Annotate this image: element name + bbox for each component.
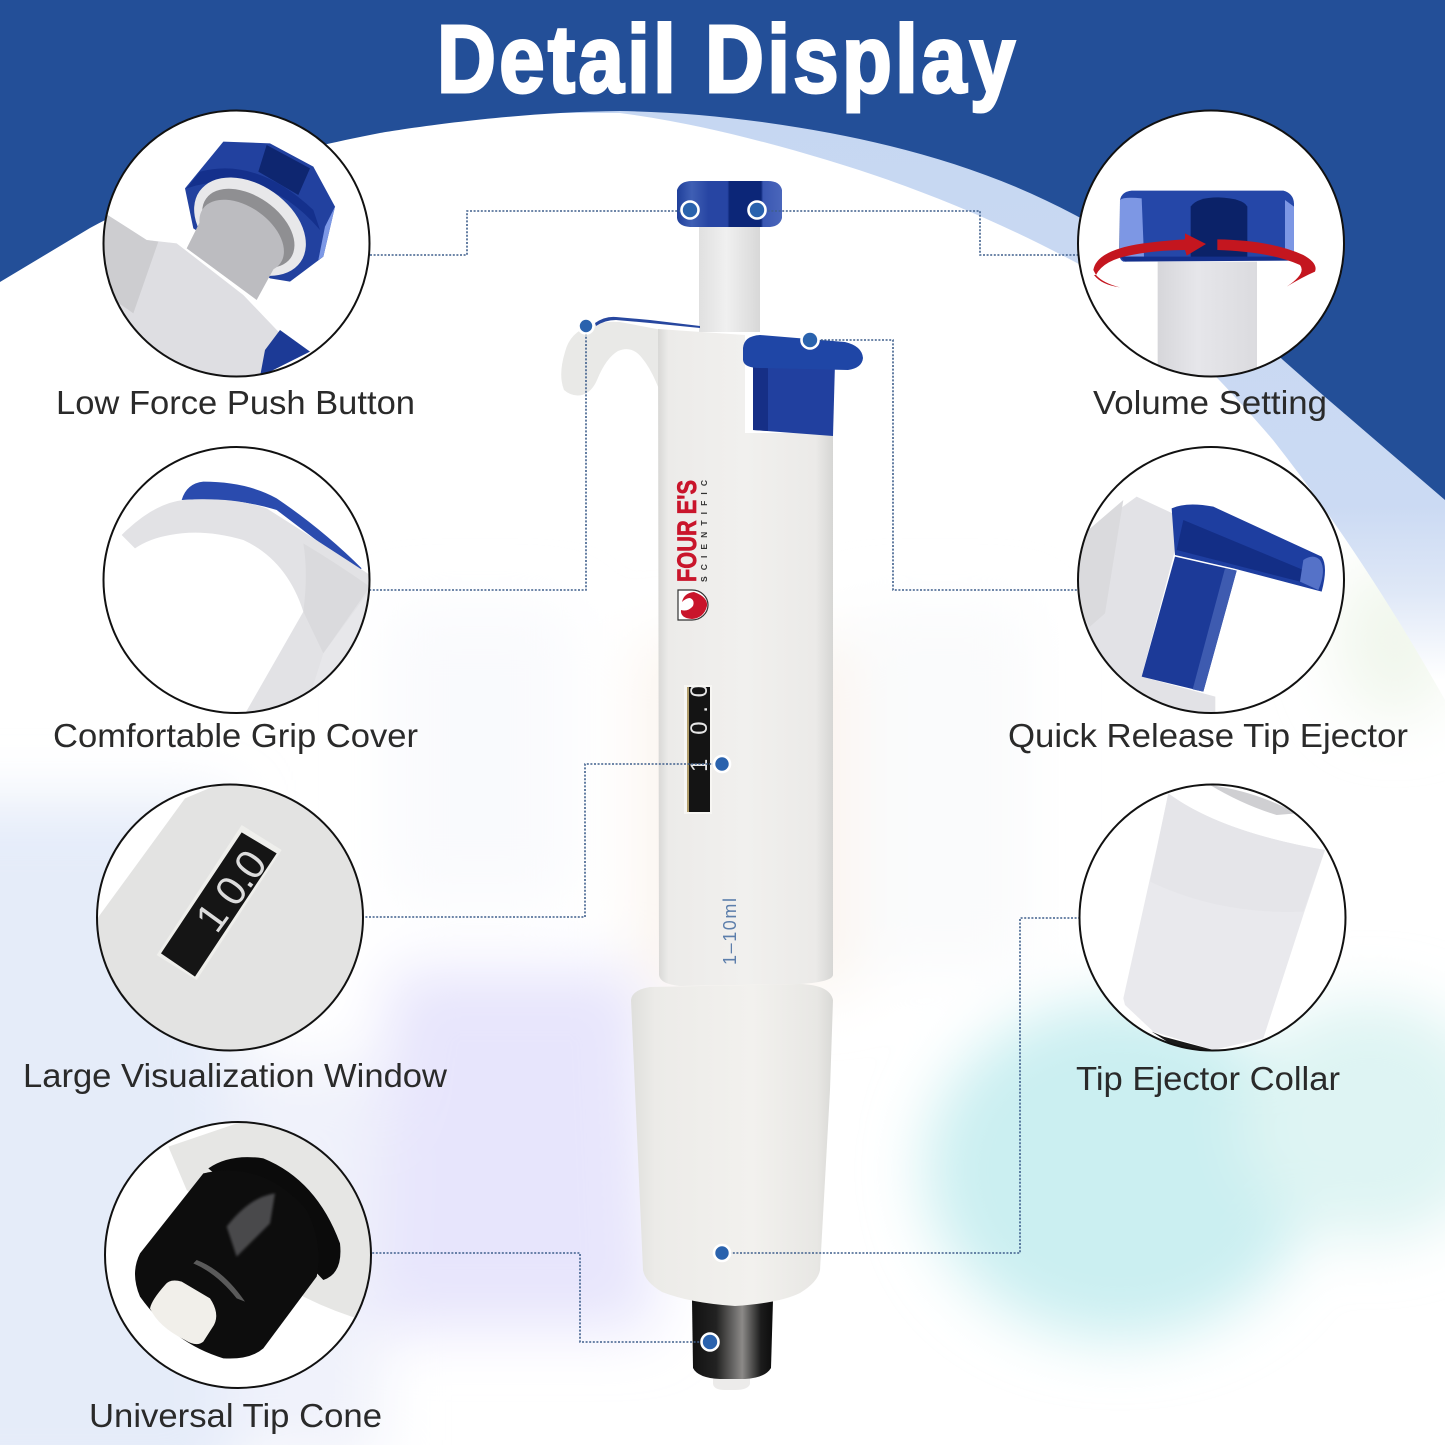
panel: low force push button <box>100 110 369 380</box>
panel: large visualization window: 1 0.0 <box>186 841 276 940</box>
panel: universal tip cone <box>105 1117 377 1388</box>
light blue swoosh band <box>0 0 1445 700</box>
pipette main body <box>658 329 833 986</box>
tip cone <box>692 1300 773 1390</box>
tip ejector button <box>743 335 863 436</box>
connector lines <box>363 211 1080 1342</box>
panel: large visualization window <box>95 782 372 1052</box>
label: comfortable grip cover: Comfortable Grip Cover <box>53 717 418 754</box>
tip ejector collar <box>631 984 833 1306</box>
volume display window: 1 0.0 <box>686 684 713 772</box>
title: Detail Display <box>437 5 1018 112</box>
label: large visualization window: Large Visualization Window <box>23 1057 447 1094</box>
pipette push button knob <box>677 181 782 227</box>
panel: volume setting <box>1078 110 1344 378</box>
dark blue header area <box>0 0 1445 500</box>
pipette plunger rod <box>699 222 760 332</box>
label: tip ejector collar: Tip Ejector Collar <box>1076 1060 1340 1097</box>
volume display window <box>684 684 713 814</box>
label: volume setting: Volume Setting <box>1093 384 1327 421</box>
panel: quick release tip ejector <box>1077 447 1344 717</box>
brand logo: SCIENTIFIC <box>699 480 709 582</box>
label: universal tip cone: Universal Tip Cone <box>89 1397 382 1434</box>
hotspot markers <box>578 202 818 1350</box>
brand logo: FOUR E'S <box>672 480 702 582</box>
panel: comfortable grip cover <box>104 447 370 717</box>
label: low force push button: Low Force Push Button <box>56 384 415 421</box>
finger hook <box>561 317 700 395</box>
pipette product illustration <box>561 181 863 1390</box>
panel: tip ejector collar <box>1080 784 1346 1050</box>
volume range label: 1–10ml <box>720 898 740 965</box>
label: quick release tip ejector: Quick Release Tip Ejector <box>1008 717 1408 754</box>
brand logo <box>672 480 709 620</box>
